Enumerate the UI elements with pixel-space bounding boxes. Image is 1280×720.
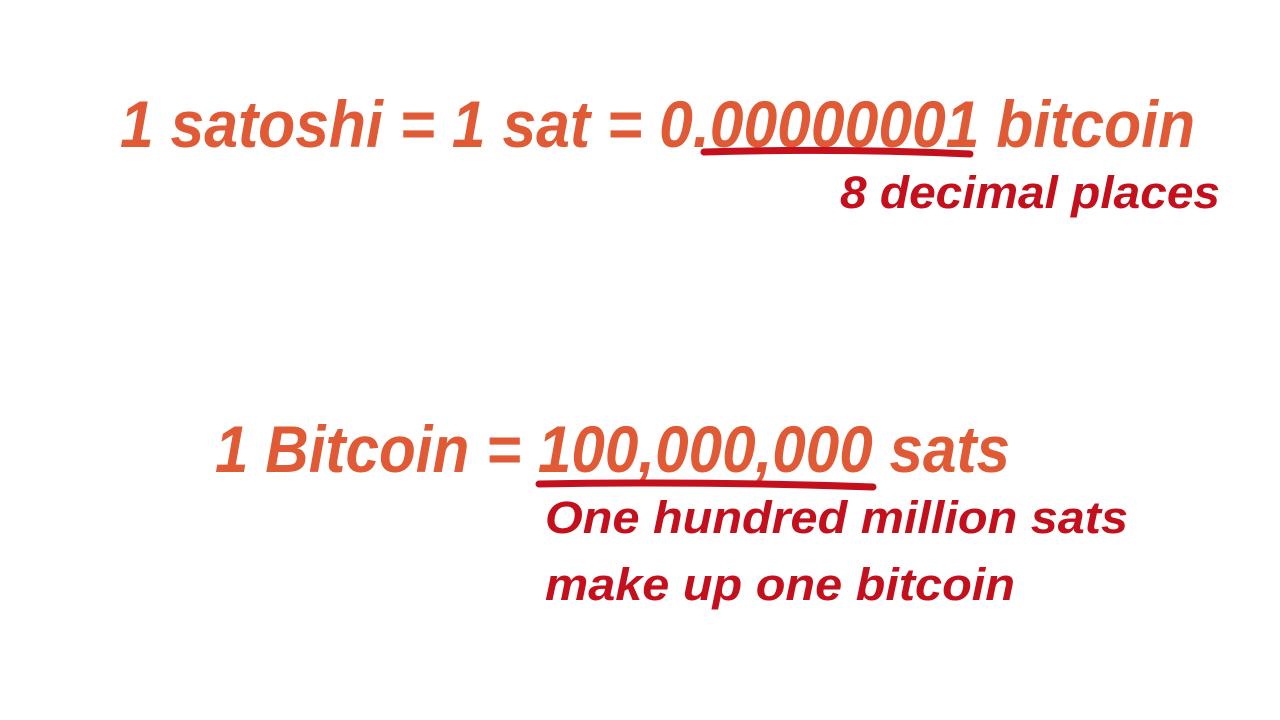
annotation: one hundred million sats: make up one bitcoin [545,559,1015,610]
annotation: one hundred million sats [545,492,1128,610]
underline: decimal digits [704,150,970,154]
annotation: 8 decimal places: 8 decimal places [840,167,1220,218]
annotation: one hundred million sats: One hundred million sats [545,492,1128,543]
underline: one hundred million [539,483,873,487]
equation: satoshi definition: 1 satoshi = 1 sat = 0.00000001 bitcoin [120,87,1195,161]
equation: bitcoin in sats: 1 Bitcoin = 100,000,000 sats [215,412,1010,486]
